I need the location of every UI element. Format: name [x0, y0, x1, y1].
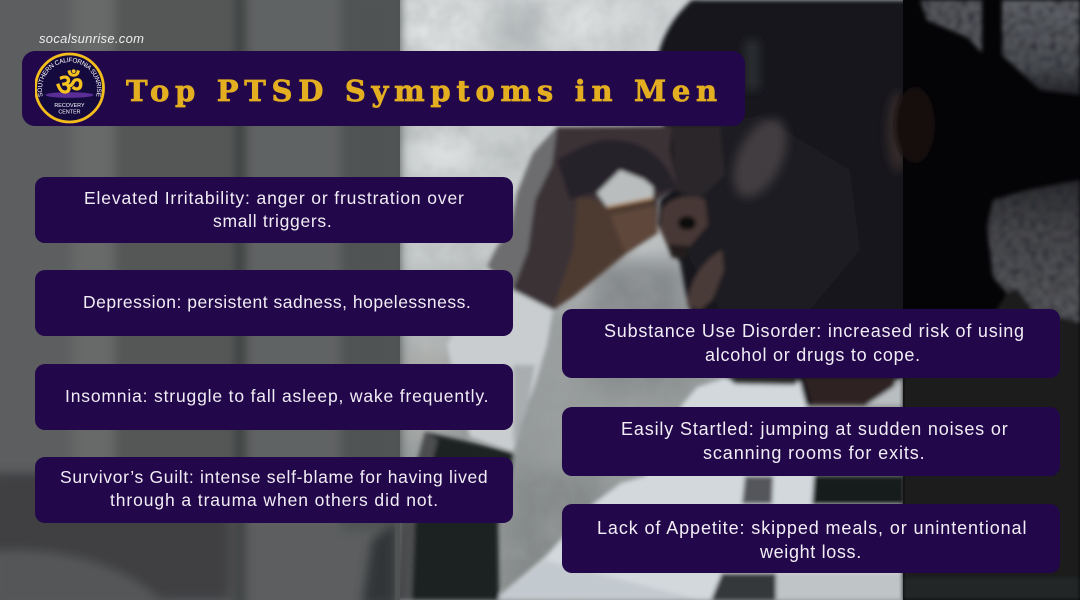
symptom card: easily startled: Easily Startled: jumping at sudden noises or: [621, 419, 1009, 439]
symptom card: depression: [35, 270, 513, 336]
palm: [553, 197, 658, 308]
textured wall lower: [987, 180, 1080, 322]
mid face: [680, 115, 860, 310]
symptom card: substance use disorder: alcohol or drugs to cope.: [705, 345, 921, 365]
nose: [660, 196, 708, 246]
website url: socalsunrise.com: [39, 31, 144, 46]
ear in shadow: [895, 87, 935, 163]
symptom card: insomnia: [35, 364, 513, 430]
symptom card: elevated irritability: [35, 177, 513, 243]
cheek highlight: [722, 111, 798, 205]
gap between fingers: [597, 170, 653, 207]
symptom card: lack of appetite: [562, 504, 1060, 573]
lower lip: [687, 250, 724, 310]
symptom card: elevated irritability: Elevated Irritability: anger or frustration over: [84, 188, 465, 208]
textured wall top: [920, 0, 982, 53]
title: Top PTSD Symptoms in Men: [126, 74, 723, 108]
symptom card: insomnia: Insomnia: struggle to fall asleep, wake frequently.: [65, 386, 489, 406]
dark neck and beard: [804, 378, 894, 405]
head and hair silhouette: [657, 0, 910, 405]
forearm: [398, 432, 513, 600]
light side of hand: [487, 127, 557, 290]
dark shirt at right: [903, 288, 1080, 600]
blurred window: [400, 0, 690, 600]
symptom card: depression: Depression: persistent sadness, hopelessness.: [83, 292, 471, 312]
gray left overlay: [0, 0, 400, 600]
symptom card: elevated irritability: small triggers.: [213, 211, 332, 231]
bandage: [447, 267, 553, 452]
shirt white: [494, 378, 904, 600]
hair tips: [745, 40, 759, 90]
symptom card: substance use disorder: Substance Use Disorder: increased risk of using: [604, 321, 1025, 341]
dark shirt shadow and tie: [812, 476, 904, 505]
logo badge: CENTER: [58, 110, 81, 116]
area above nose: [672, 126, 725, 198]
symptom card: substance use disorder: [562, 309, 1060, 378]
dark right band: [903, 0, 1080, 600]
ear: [887, 92, 909, 172]
index finger: [557, 140, 677, 200]
logo badge: SOUTHERN CALIFORNIA SUNRISE: [38, 58, 102, 97]
symptom card: survivor's guilt: through a trauma when others did not.: [110, 490, 439, 510]
back of hand: [487, 126, 677, 310]
logo badge: RECOVERY: [54, 103, 85, 109]
symptom card: easily startled: scanning rooms for exits.: [703, 443, 926, 463]
white collar: [866, 380, 904, 405]
symptom card: lack of appetite: weight loss.: [760, 542, 862, 562]
logo badge: [35, 52, 105, 124]
header banner: [22, 51, 745, 126]
symptom card: survivor's guilt: [35, 457, 513, 523]
upper lip shadow: [667, 244, 690, 258]
logo badge: ॐ: [56, 68, 83, 103]
symptom card: survivor's guilt: Survivor’s Guilt: intense self-blame for having lived: [60, 467, 488, 487]
symptom card: easily startled: [562, 407, 1060, 476]
symptom card: lack of appetite: Lack of Appetite: skipped meals, or unintentional: [597, 518, 1027, 538]
